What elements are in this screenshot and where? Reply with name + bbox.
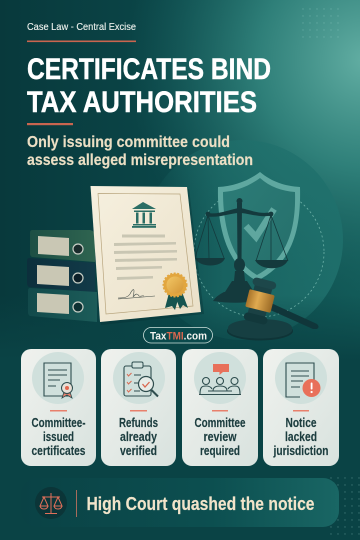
card label: review [204, 430, 237, 444]
card label: Notice [286, 416, 317, 430]
card label [32, 416, 86, 458]
card label: verified [120, 444, 157, 458]
panel: refunds already verified [101, 349, 176, 466]
icon: notice with alert [275, 352, 327, 404]
accent rule [50, 410, 67, 412]
title rule [27, 123, 73, 125]
verdict text: High Court quashed the notice [86, 493, 314, 514]
panel: notice lacked jurisdiction [263, 349, 339, 466]
title [27, 53, 271, 119]
card label [273, 416, 328, 458]
binder: teal [28, 288, 97, 322]
title: TAX AUTHORITIES [27, 86, 257, 119]
certificate [90, 186, 204, 325]
icon: shield [194, 172, 324, 317]
certificate text lines [114, 234, 177, 280]
icon: clipboard and magnifier [113, 352, 165, 404]
card label: issued [43, 430, 74, 444]
badge: TaxTMI.com [144, 328, 212, 343]
icon: committee meeting [194, 352, 246, 404]
card label: Committee- [32, 416, 86, 430]
panel: committee review required [182, 349, 258, 466]
signature [118, 290, 155, 299]
card label: Refunds [119, 416, 158, 430]
binders [27, 230, 97, 322]
icon: gold seal [164, 274, 188, 310]
icon: certificate with ribbon [32, 352, 84, 404]
card label: Committee [194, 416, 246, 430]
binder: green [30, 230, 95, 262]
icon: scales [35, 487, 67, 519]
icon: check mark [246, 209, 274, 237]
panel: committee-issued certificates [21, 349, 96, 466]
binder: navy [27, 258, 95, 292]
icon: courthouse [132, 202, 156, 228]
panel: verdict banner [21, 478, 339, 527]
accent rule [212, 410, 228, 412]
icon: balance scales [195, 198, 288, 303]
accent rule [293, 410, 309, 412]
kicker rule [27, 40, 136, 42]
subtitle [27, 134, 253, 169]
card label: lacked [285, 430, 317, 444]
icon: gavel [227, 277, 318, 340]
card label: required [200, 444, 240, 458]
kicker: Case Law - Central Excise [27, 22, 136, 33]
card label [119, 416, 158, 458]
divider [75, 490, 78, 517]
badge: TaxTMI.com: TaxTMI.com [150, 330, 207, 342]
card label: jurisdiction [273, 444, 328, 458]
title: CERTIFICATES BIND [27, 53, 271, 86]
subtitle: Only issuing committee could [27, 134, 230, 151]
accent rule [130, 410, 147, 412]
card label: already [120, 430, 157, 444]
subtitle: assess alleged misrepresentation [27, 152, 253, 169]
card label [194, 416, 246, 458]
card label: certificates [32, 444, 86, 458]
